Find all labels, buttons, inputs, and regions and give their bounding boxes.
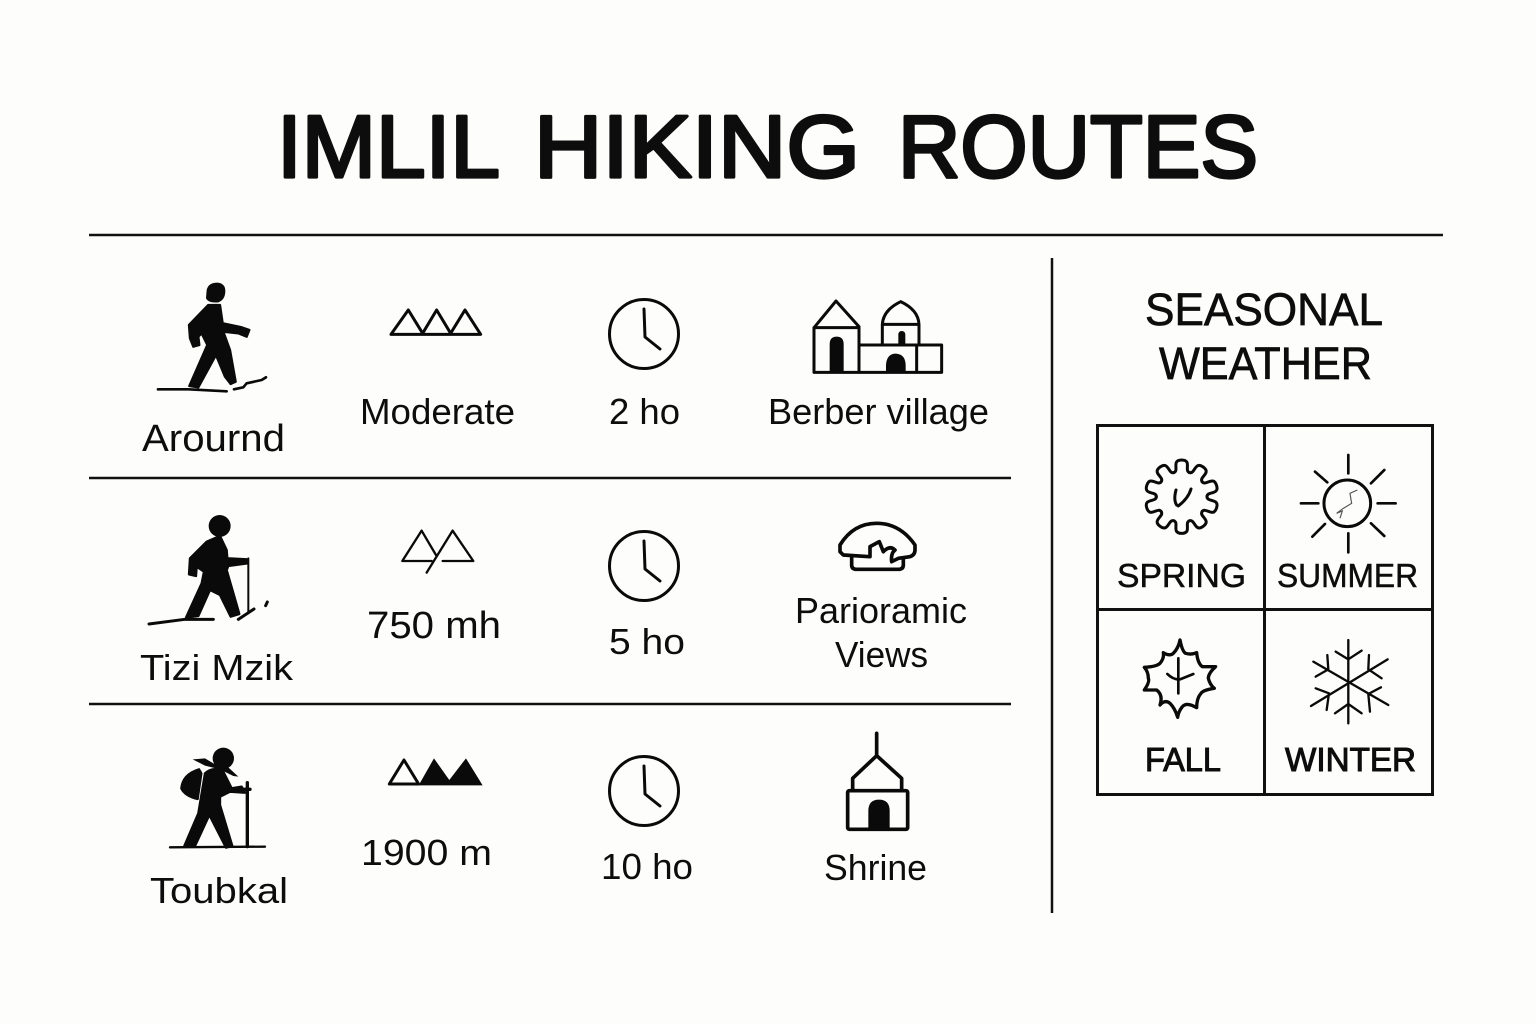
cell: fall <box>1144 640 1221 778</box>
icon: walking hiker <box>158 283 266 391</box>
title: ROUTES <box>898 97 1258 196</box>
icon: spring flower <box>1144 460 1219 533</box>
title: IMLIL <box>277 97 500 196</box>
label: summer: SUMMER <box>1277 557 1418 594</box>
icon: Berber village <box>814 301 942 372</box>
icon: clock <box>610 300 678 368</box>
highlight: Parioramic Views: Views <box>835 634 928 675</box>
panel: seasonal weather <box>1098 284 1432 794</box>
label: winter: WINTER <box>1285 741 1416 778</box>
icon: clock <box>610 532 678 600</box>
route name: Tizi Mzik: Tizi Mzik <box>140 647 294 688</box>
icon: autumn leaf <box>1144 640 1216 717</box>
difficulty: Moderate: Moderate <box>360 391 515 432</box>
route name: Toubkal: Toubkal <box>150 870 288 911</box>
icon: hiker with backpack <box>170 748 265 848</box>
icon: panoramic viewpoint <box>840 523 915 569</box>
route name: Arournd: Arournd <box>142 418 285 460</box>
label: fall: FALL <box>1145 741 1221 778</box>
icon: one outlined and two solid peaks <box>389 758 483 785</box>
cell: winter <box>1285 640 1416 778</box>
season grid <box>1098 426 1432 794</box>
icon: shrine <box>848 733 908 829</box>
elevation: 1900 m: 1900 m <box>361 832 492 873</box>
icon: two peaks <box>402 531 473 573</box>
cell: spring <box>1117 460 1246 594</box>
duration: 10 ho: 10 ho <box>601 846 693 887</box>
icon: snowflake <box>1311 640 1388 723</box>
cell: summer <box>1277 455 1418 594</box>
duration: 2 ho: 2 ho <box>609 391 680 432</box>
duration: 5 ho: 5 ho <box>609 621 685 662</box>
elevation: 750 mh: 750 mh <box>367 605 501 647</box>
heading: seasonal weather: SEASONAL <box>1145 284 1383 335</box>
row: Toubkal route <box>150 733 927 911</box>
icon: three outlined peaks <box>391 310 481 334</box>
highlight: Parioramic Views: Parioramic <box>795 590 967 631</box>
icon: hiker with pole <box>149 515 267 624</box>
row: Tizi Mzik route <box>140 515 967 688</box>
heading: seasonal weather: WEATHER <box>1159 338 1372 389</box>
icon: clock <box>610 756 678 826</box>
highlight: Berber village: Berber village <box>768 391 989 432</box>
title: HIKING <box>534 97 860 196</box>
icon: sun <box>1301 455 1396 552</box>
row: Aroumd route <box>142 283 989 460</box>
highlight: Shrine: Shrine <box>824 847 927 888</box>
heading: seasonal weather <box>1145 284 1383 389</box>
title <box>277 97 1258 196</box>
label: spring: SPRING <box>1117 557 1246 594</box>
panel: hiking routes table <box>140 283 989 911</box>
highlight: Parioramic Views <box>795 590 967 675</box>
